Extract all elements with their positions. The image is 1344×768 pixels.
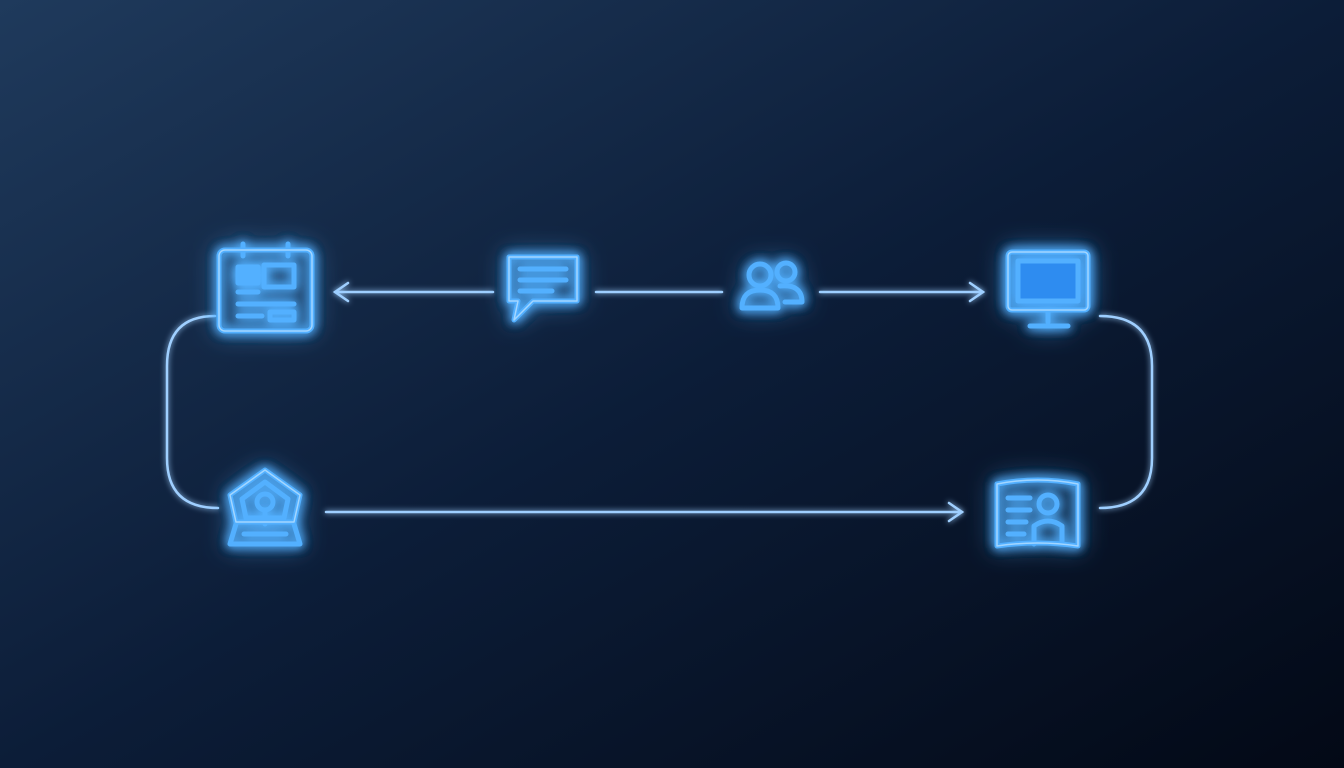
icon: shielded target [230,470,300,544]
icon: document with person [997,480,1078,546]
line: chat to people [596,291,722,293]
arrow: people to monitor [820,283,983,301]
icon cores [219,250,1088,546]
connectors [167,283,1152,521]
arrow: bottom [326,503,962,521]
icon: monitor [1008,252,1088,326]
icon: people [742,263,802,308]
icon: calendar [219,244,312,331]
loop: right [1100,316,1152,508]
loop: left [167,316,218,508]
arrow: chat to calendar [335,283,493,301]
icon: chat bubble [509,257,577,320]
